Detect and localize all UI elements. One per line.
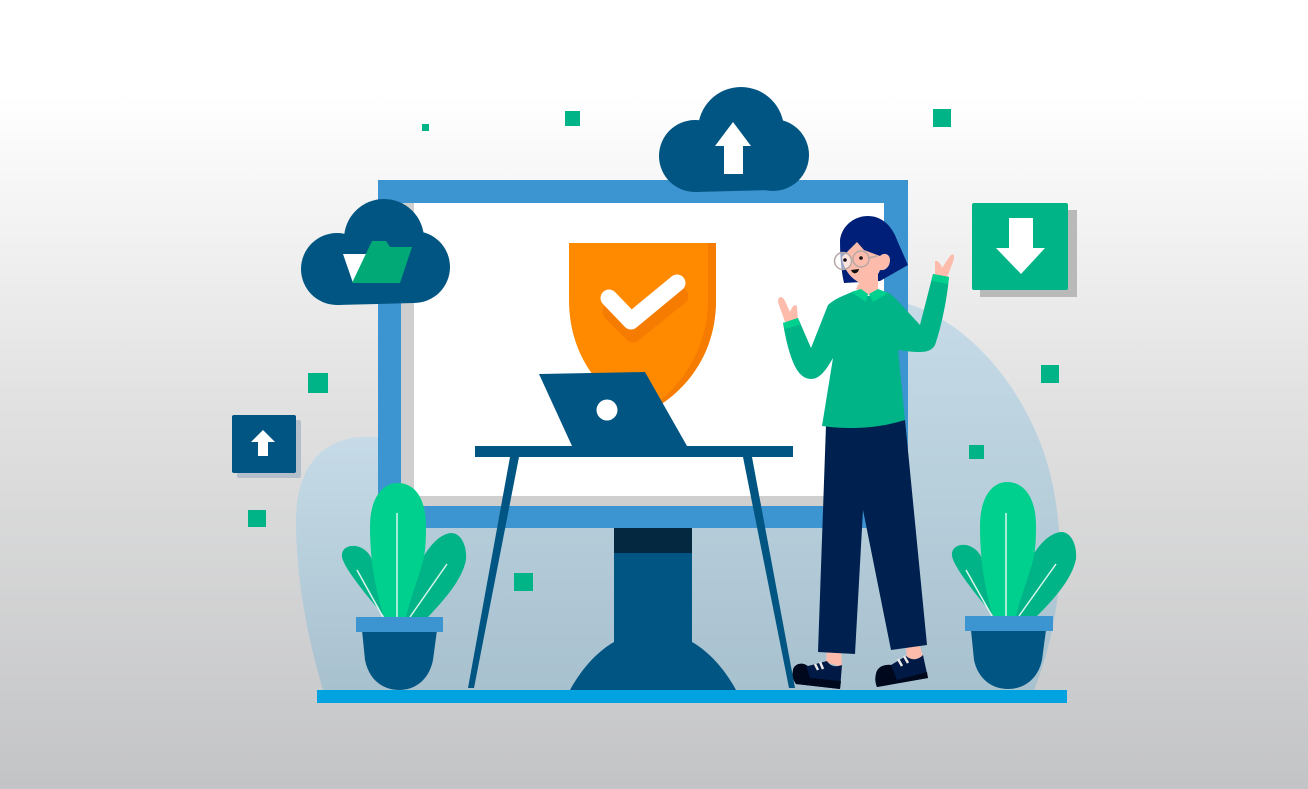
laptop <box>539 372 687 446</box>
cloud: upload <box>659 87 809 192</box>
monitor stand <box>570 528 736 690</box>
desk top <box>475 446 793 457</box>
monitor frame <box>378 180 908 528</box>
sweater <box>783 274 949 428</box>
glasses <box>834 251 877 270</box>
monitor <box>378 180 908 690</box>
cuffs and collar <box>783 274 949 329</box>
person <box>778 216 954 689</box>
icon: down arrow <box>996 218 1045 274</box>
face <box>842 242 890 283</box>
floor bar <box>317 690 1067 703</box>
desk legs <box>468 457 795 688</box>
icon: up arrow <box>715 122 751 174</box>
download tile <box>972 203 1077 297</box>
plant: right <box>952 482 1076 689</box>
shoes <box>793 661 842 689</box>
monitor screen shadow <box>401 203 883 506</box>
background blob: right <box>400 303 1060 690</box>
background blob: left <box>296 437 400 690</box>
leaves <box>342 546 385 617</box>
trousers <box>818 420 927 654</box>
monitor screen <box>414 203 884 496</box>
cloud: folder <box>301 199 450 305</box>
pot <box>971 630 1046 689</box>
plant: left <box>342 483 466 690</box>
icon: up arrow <box>251 430 275 456</box>
pot <box>362 630 437 690</box>
mouth <box>851 269 859 273</box>
desk with laptop <box>468 372 795 688</box>
ankles <box>826 643 923 667</box>
hair back <box>840 216 908 283</box>
shield icon with check mark <box>569 243 716 415</box>
neck <box>856 272 878 295</box>
icon: folder <box>343 241 412 283</box>
hands <box>778 297 798 322</box>
decorative squares <box>248 109 1059 591</box>
upload tile <box>232 415 301 478</box>
